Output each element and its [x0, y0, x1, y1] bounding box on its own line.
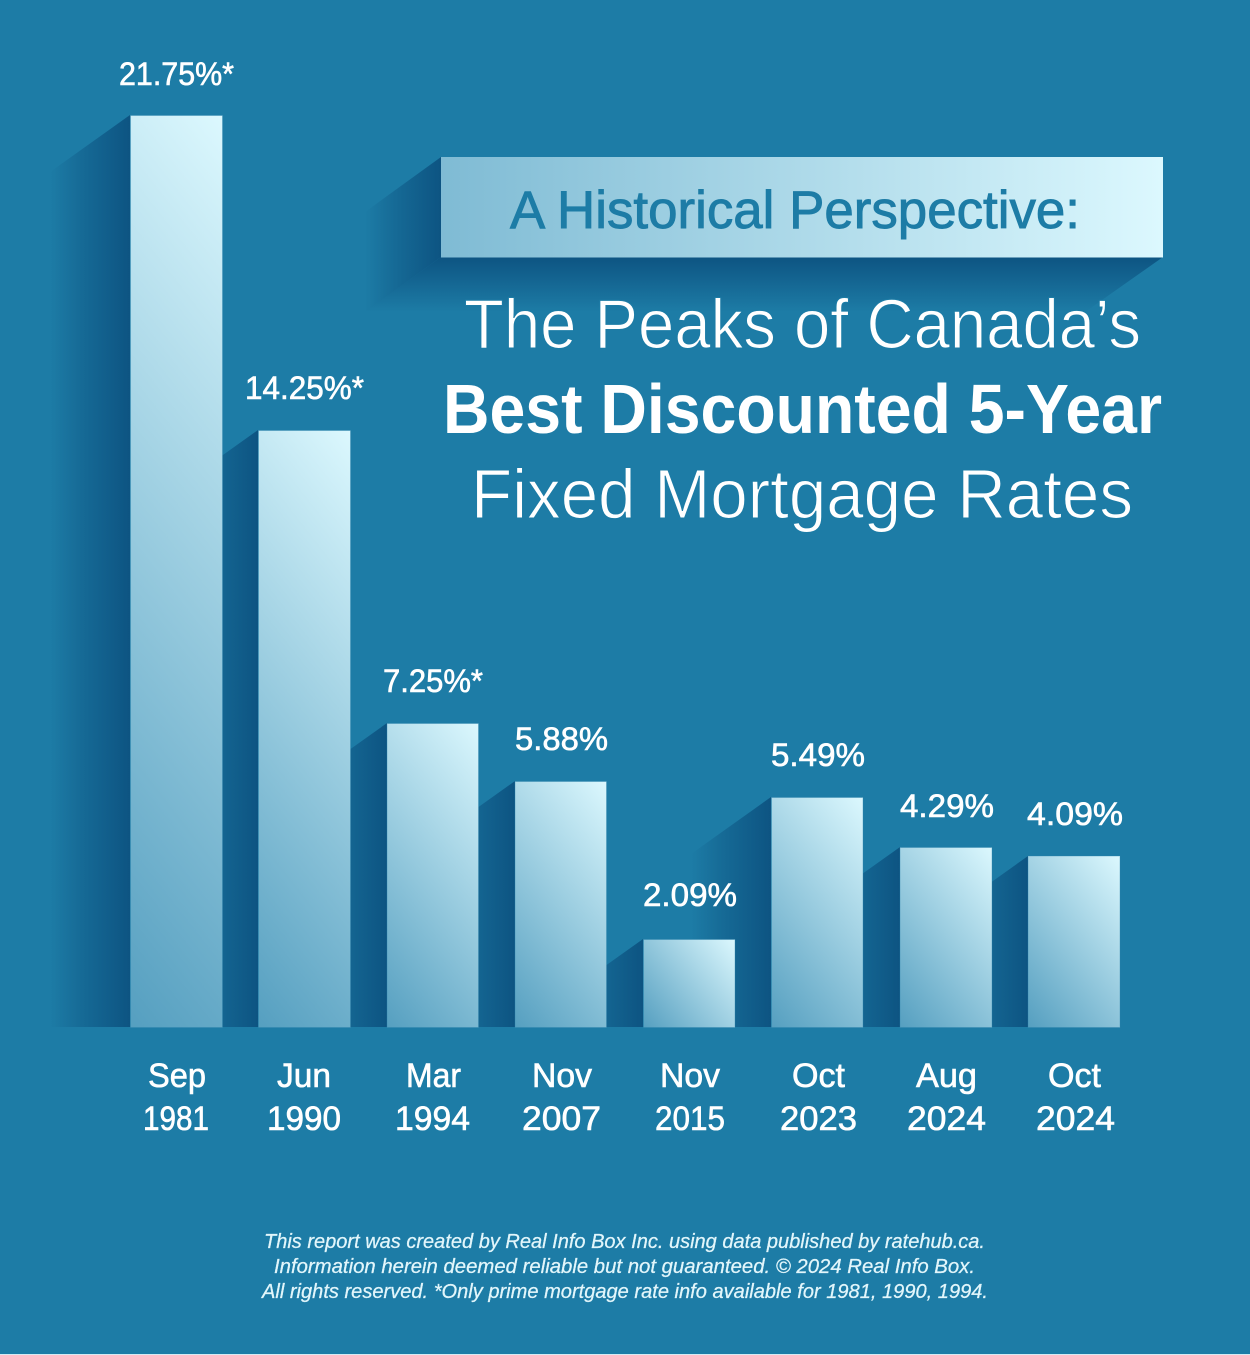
value labels: [119, 56, 1123, 913]
banner: A Historical Perspective: A Historical Perspective:: [510, 181, 1080, 240]
bar: Oct 2023: [772, 798, 863, 1028]
date: Nov 2015: Nov: [660, 1057, 720, 1095]
bar: Mar 1994: [387, 724, 478, 1028]
bar: Nov 2007: [515, 782, 606, 1028]
bar: Aug 2024: [900, 848, 992, 1028]
bar: Jun 1990: [258, 430, 350, 1028]
date: Oct 2023: [780, 1057, 857, 1138]
date: Mar 1994: Mar: [406, 1057, 461, 1095]
footer disclaimer: This report was created by Real Info Box Inc. using data published by ratehub.ca.: [264, 1231, 985, 1253]
bar: Oct 2024: [1028, 856, 1120, 1028]
title line 2: Best Discounted 5-Year: [443, 370, 1162, 448]
date: Jun 1990: 1990: [267, 1100, 341, 1138]
title line 3: Fixed Mortgage Rates: [471, 455, 1133, 533]
title line 1: The Peaks of Canada’s: [464, 285, 1141, 363]
date: Nov 2015: [655, 1057, 725, 1138]
banner: A Historical Perspective: [441, 157, 1163, 258]
date: Sep 1981: Sep: [148, 1057, 206, 1095]
date: Aug 2024: 2024: [907, 1100, 986, 1138]
value: 5.49%: 5.49%: [771, 737, 865, 773]
date: Mar 1994: 1994: [395, 1100, 470, 1138]
date: Oct 2024: Oct: [1048, 1057, 1102, 1095]
date: Oct 2024: [1036, 1057, 1115, 1138]
date: Aug 2024: Aug: [916, 1057, 977, 1095]
bar: Nov 2015: [644, 940, 735, 1028]
date: Sep 1981: [143, 1057, 209, 1138]
date: Oct 2024: 2024: [1036, 1100, 1115, 1138]
banner shadow: [365, 157, 1163, 312]
bar chart: mortgage rate peaks: [50, 115, 1120, 1028]
bar shadows: [50, 115, 1028, 1027]
value: 5.88%: 5.88%: [515, 721, 608, 757]
bar: Sep 1981: [130, 116, 222, 1028]
value: 14.25%: 14.25%*: [245, 370, 364, 406]
date: Nov 2007: 2007: [522, 1100, 601, 1138]
date labels: [143, 1057, 1115, 1138]
date: Nov 2007: [522, 1057, 601, 1138]
value: 2.09%: 2.09%: [643, 877, 737, 913]
date: Sep 1981: 1981: [143, 1100, 209, 1138]
value: 21.75%: 21.75%*: [119, 56, 234, 92]
date: Nov 2007: Nov: [532, 1057, 592, 1095]
date: Nov 2015: 2015: [655, 1100, 725, 1138]
date: Jun 1990: [267, 1057, 341, 1138]
date: Aug 2024: [907, 1057, 986, 1138]
date: Jun 1990: Jun: [277, 1057, 331, 1095]
title: [443, 285, 1162, 533]
value: 4.09%: 4.09%: [1027, 796, 1123, 832]
date: Oct 2023: 2023: [780, 1100, 857, 1138]
value: 4.29%: 4.29%: [900, 788, 994, 824]
date: Oct 2023: Oct: [792, 1057, 846, 1095]
footer disclaimer: Information herein deemed reliable but not guaranteed. © 2024 Real Info Box.: [274, 1256, 975, 1278]
footer disclaimer: All rights reserved. *Only prime mortgage rate info available for 1981, 1990, 1994.: [261, 1281, 988, 1303]
date: Mar 1994: [395, 1057, 470, 1138]
footer disclaimer: [261, 1231, 988, 1303]
value: 7.25%: 7.25%*: [383, 663, 483, 699]
